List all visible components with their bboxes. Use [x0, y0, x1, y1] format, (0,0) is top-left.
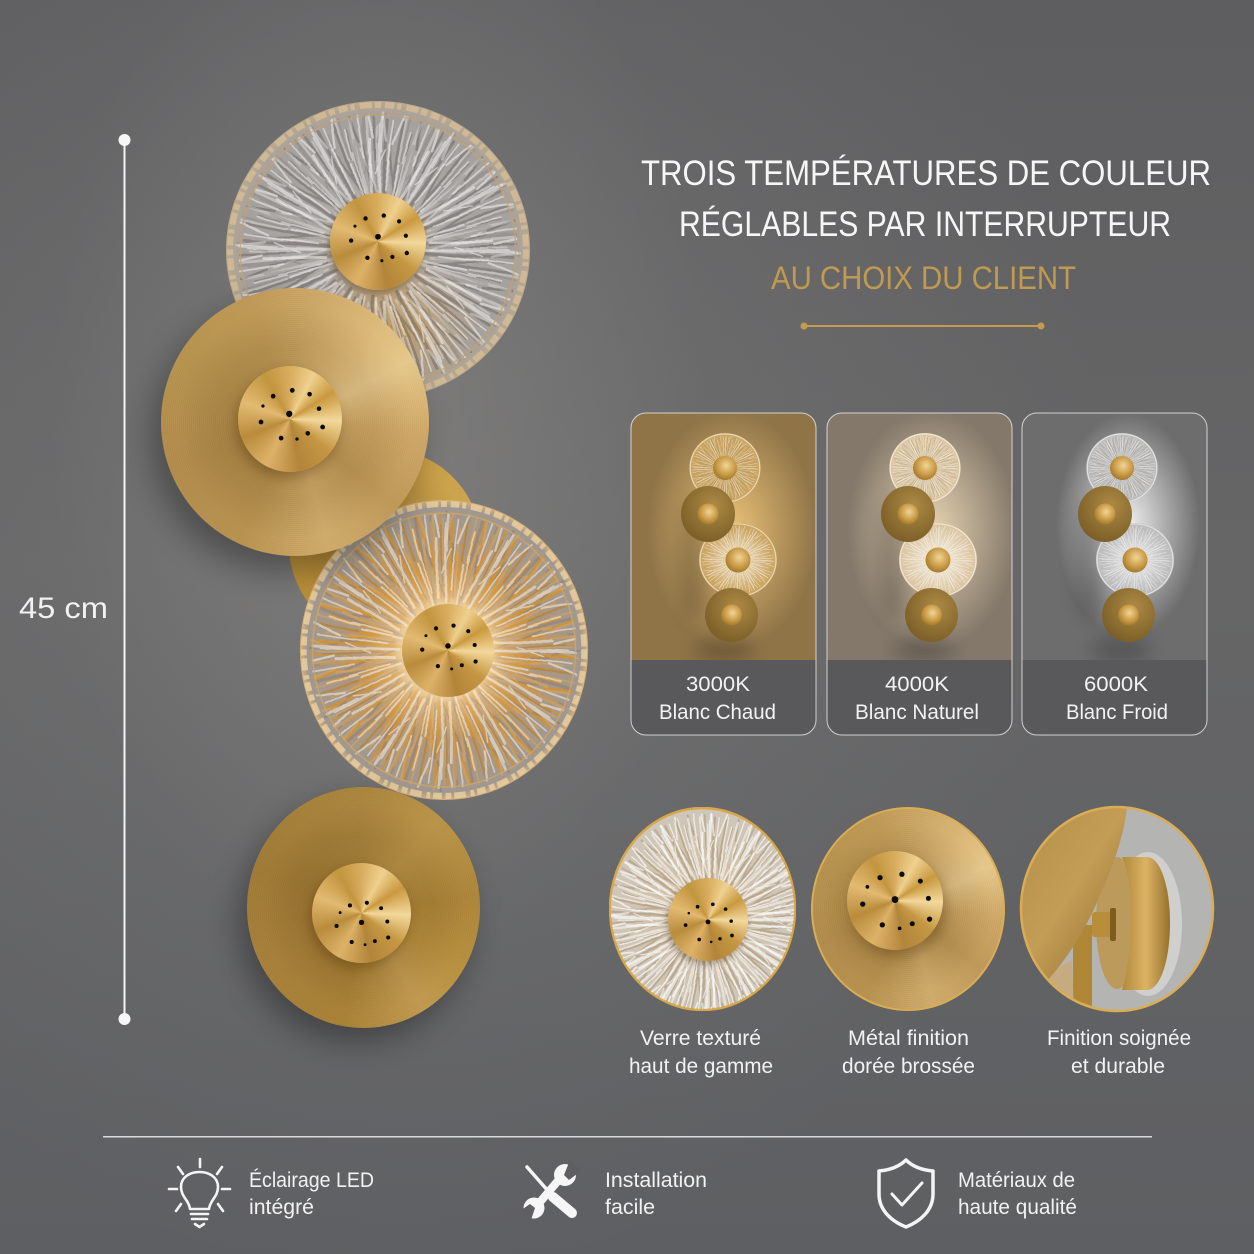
metal hub [847, 851, 943, 950]
icon: tools [520, 1160, 581, 1223]
gold divider [800, 322, 1044, 330]
upper disc hub [238, 366, 342, 472]
caption: brushed metal: dorée brossée [842, 1055, 975, 1078]
caption: textured glass: haut de gamme [629, 1055, 773, 1078]
text: materials: Matériaux de [958, 1169, 1075, 1192]
upper glass hub [330, 193, 426, 290]
product photo: wall lamp [140, 101, 588, 1052]
text: installation [605, 1169, 707, 1219]
card: 6000K [1022, 413, 1207, 735]
title: RÉGLABLES PAR INTERRUPTEUR [679, 205, 1171, 244]
caption: durable finish: Finition soignée [1047, 1027, 1191, 1050]
caption: durable finish: et durable [1071, 1055, 1165, 1078]
icon: light bulb [169, 1159, 230, 1227]
height dimension: 45 cm [19, 592, 108, 625]
upper brushed disc [161, 288, 429, 556]
card: 3000K: 3000K [686, 673, 750, 696]
caption: brushed metal: Métal finition [848, 1027, 969, 1050]
title [641, 154, 1211, 244]
card: 3000K: Blanc Chaud [659, 701, 776, 724]
card: 6000K: 6000K [1084, 673, 1148, 696]
text: LED [249, 1169, 374, 1219]
lower disc hub [312, 863, 411, 963]
lower glass hub [402, 604, 494, 697]
card: 4000K [827, 410, 1017, 735]
text: installation: facile [605, 1196, 655, 1219]
text: installation: Installation [605, 1169, 707, 1192]
detail circle: textured glass [609, 807, 796, 1011]
caption: textured glass [629, 1027, 773, 1078]
text: LED: intégré [249, 1196, 314, 1219]
caption: textured glass: Verre texturé [640, 1027, 761, 1050]
caption: brushed metal [842, 1027, 975, 1078]
upper glass diffuser [226, 101, 530, 392]
card: 4000K: 4000K [885, 673, 949, 696]
card: 6000K: Blanc Froid [1066, 701, 1168, 724]
detail circle: brushed metal [811, 807, 1005, 1011]
lower glass diffuser [300, 500, 588, 800]
card: 3000K [631, 410, 817, 735]
detail circle: side profile [1015, 806, 1214, 1012]
glass hub [668, 878, 748, 961]
height dimension [19, 134, 130, 1025]
icon: shield [879, 1160, 933, 1227]
back disc [289, 449, 481, 641]
card: 4000K: Blanc Naturel [855, 701, 979, 724]
text: materials [958, 1169, 1077, 1219]
text: materials: haute qualité [958, 1196, 1077, 1219]
lower brushed disc [247, 787, 480, 1028]
caption: durable finish [1047, 1027, 1191, 1078]
subtitle: AU CHOIX DU CLIENT [771, 260, 1076, 296]
text: LED: Éclairage LED [249, 1169, 374, 1192]
